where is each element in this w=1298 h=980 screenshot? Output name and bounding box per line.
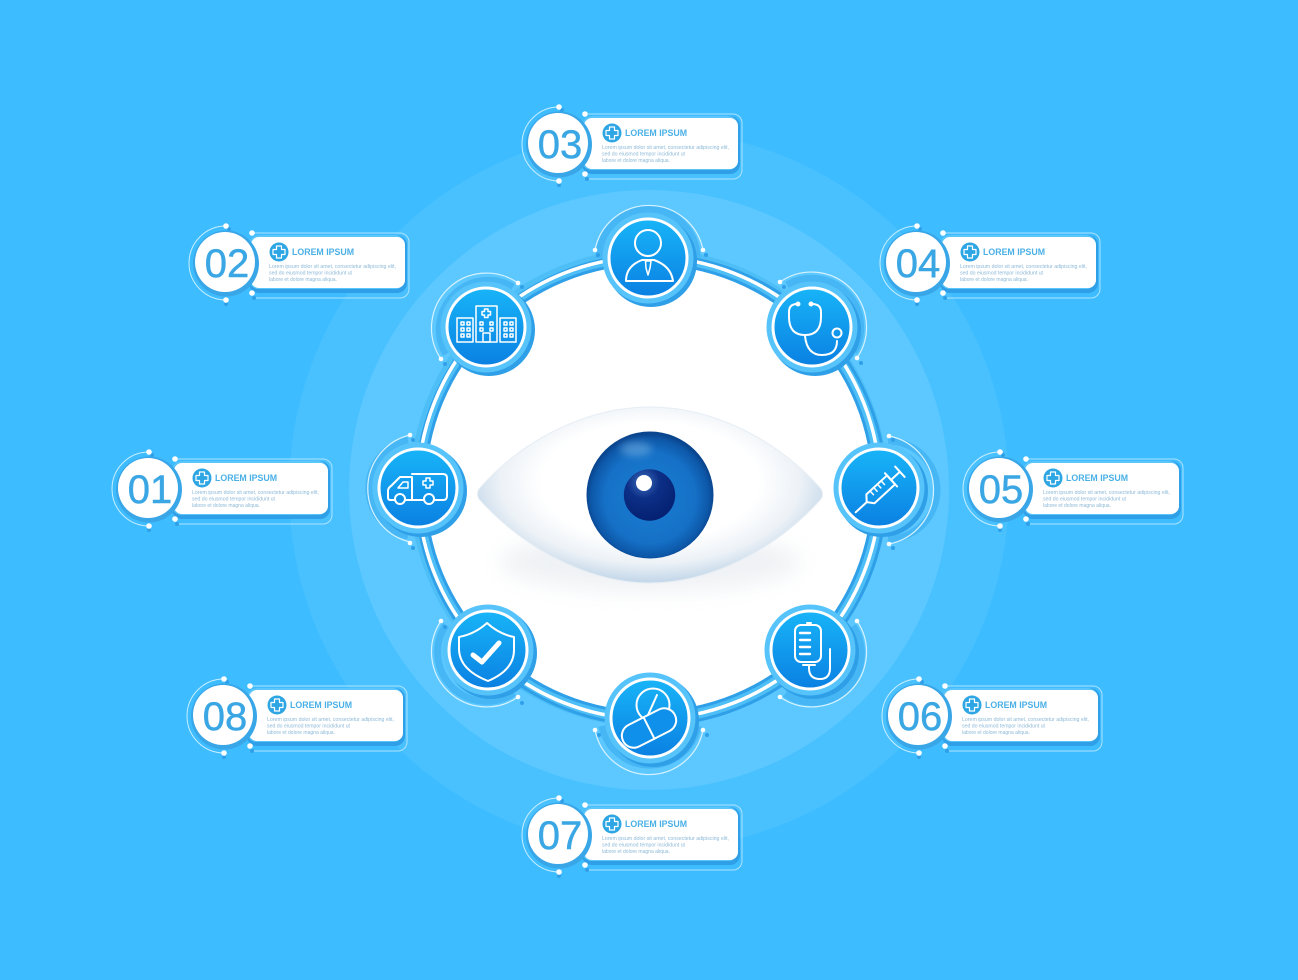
card 08 <box>187 676 407 759</box>
card 01: LOREM IPSUM <box>215 473 277 483</box>
node: iv drip <box>764 604 867 707</box>
node: stethoscope <box>766 272 867 376</box>
card 07: Lorem ipsum dolor sit amet, consectetur adipiscing elit, <box>602 836 729 842</box>
node: shield <box>431 604 537 707</box>
card 08: labore et dolore magna aliqua. <box>267 730 335 736</box>
icon: hospital <box>457 306 516 342</box>
icon: stethoscope <box>789 302 842 355</box>
card 06: labore et dolore magna aliqua. <box>962 730 1030 736</box>
card 03: labore et dolore magna aliqua. <box>602 158 670 164</box>
card 08: sed do eiusmod tempor incididunt ut <box>267 724 351 730</box>
card 05: 05 <box>979 468 1023 512</box>
card 05: LOREM IPSUM <box>1066 473 1128 483</box>
card 06: Lorem ipsum dolor sit amet, consectetur adipiscing elit, <box>962 717 1089 723</box>
card 02: LOREM IPSUM <box>292 247 354 257</box>
icon: ambulance <box>388 474 447 504</box>
card 05: labore et dolore magna aliqua. <box>1043 503 1111 509</box>
card 03: 03 <box>538 123 582 167</box>
card 01: Lorem ipsum dolor sit amet, consectetur adipiscing elit, <box>192 490 319 496</box>
card 03: LOREM IPSUM <box>625 128 687 138</box>
card 01: 01 <box>128 468 172 512</box>
icon: doctor <box>626 230 673 281</box>
card 04: labore et dolore magna aliqua. <box>960 277 1028 283</box>
node: hospital <box>431 273 535 376</box>
card 07 <box>522 795 742 878</box>
card 05 <box>963 449 1183 532</box>
card 04: Lorem ipsum dolor sit amet, consectetur adipiscing elit, <box>960 264 1087 270</box>
inner halo circle <box>349 190 949 790</box>
eye <box>478 407 822 592</box>
card 04: LOREM IPSUM <box>983 247 1045 257</box>
card 06: sed do eiusmod tempor incididunt ut <box>962 724 1046 730</box>
iris highlight <box>620 442 652 456</box>
icon: iv bag <box>795 623 830 679</box>
card 07: sed do eiusmod tempor incididunt ut <box>602 842 686 848</box>
card 03: sed do eiusmod tempor incididunt ut <box>602 152 686 158</box>
card 04: sed do eiusmod tempor incididunt ut <box>960 270 1044 276</box>
card 03 <box>522 104 742 187</box>
central disc with ring <box>416 255 886 725</box>
card 07: labore et dolore magna aliqua. <box>602 849 670 855</box>
icon: syringe <box>850 465 906 519</box>
card 02 <box>189 223 409 306</box>
node: pills <box>593 672 709 775</box>
card 02: sed do eiusmod tempor incididunt ut <box>269 270 353 276</box>
card 03: Lorem ipsum dolor sit amet, consectetur adipiscing elit, <box>602 145 729 151</box>
outer halo circle <box>289 130 1009 850</box>
icon: pills <box>618 688 680 752</box>
card 01 <box>112 449 332 532</box>
pupil highlight <box>636 475 652 491</box>
card 06: LOREM IPSUM <box>985 700 1047 710</box>
iris <box>586 432 714 558</box>
card 04 <box>880 223 1100 306</box>
card 08: 08 <box>203 695 247 739</box>
node: syringe <box>834 434 937 550</box>
node: ambulance <box>368 433 467 550</box>
card 01: labore et dolore magna aliqua. <box>192 503 260 509</box>
card 05: sed do eiusmod tempor incididunt ut <box>1043 496 1127 502</box>
card 04: 04 <box>896 242 940 286</box>
card 02: labore et dolore magna aliqua. <box>269 277 337 283</box>
card 08: Lorem ipsum dolor sit amet, consectetur adipiscing elit, <box>267 717 394 723</box>
eye white <box>478 407 822 583</box>
card 06 <box>882 676 1102 759</box>
node: doctor <box>593 205 708 307</box>
card 05: Lorem ipsum dolor sit amet, consectetur adipiscing elit, <box>1043 490 1170 496</box>
pupil <box>624 469 675 521</box>
card 07: 07 <box>538 814 582 858</box>
card 02: Lorem ipsum dolor sit amet, consectetur adipiscing elit, <box>269 264 396 270</box>
icon: shield check <box>459 623 514 681</box>
card 07: LOREM IPSUM <box>625 819 687 829</box>
eye shadow <box>500 532 800 592</box>
card 06: 06 <box>898 695 942 739</box>
card 02: 02 <box>205 242 249 286</box>
card 08: LOREM IPSUM <box>290 700 352 710</box>
card 01: sed do eiusmod tempor incididunt ut <box>192 496 276 502</box>
